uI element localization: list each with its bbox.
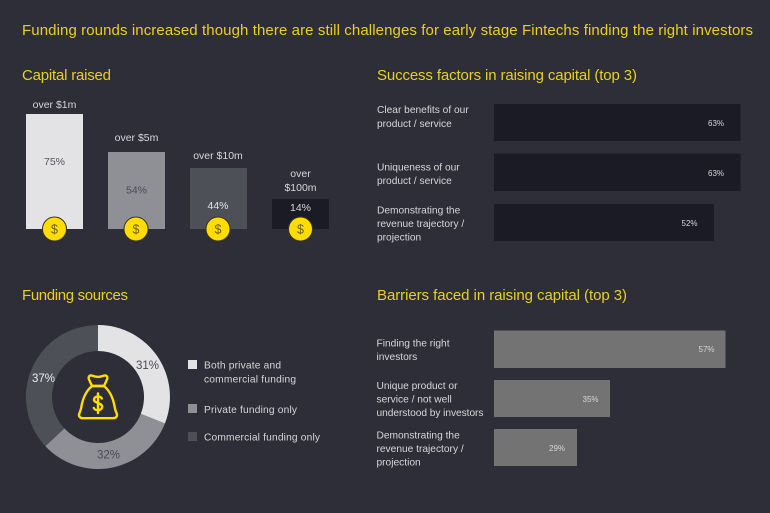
icon: coin 2: $ — [133, 222, 140, 236]
bar: over $100m: $100m — [284, 182, 317, 194]
row: revenue trajectory: Demonstrating the — [377, 206, 461, 216]
row: revenue trajectory: revenue trajectory / — [376, 444, 464, 455]
donut chart: 31% — [136, 360, 159, 372]
donut chart: 32% — [97, 450, 120, 462]
bar: over $5m: over $5m — [115, 132, 159, 144]
heading: funding sources: Funding sources — [22, 287, 128, 304]
row: finding investors: 57% — [698, 345, 715, 354]
icon: coin 1: $ — [51, 222, 58, 236]
row: unique product: 35% — [582, 395, 599, 404]
donut chart: 37% — [32, 373, 55, 385]
row: finding investors: Finding the right — [376, 338, 450, 350]
row: uniqueness: 63% — [708, 169, 724, 178]
panel: barriers — [376, 287, 726, 468]
row: clear benefits — [377, 104, 740, 141]
bar: over $10m: 44% — [207, 200, 229, 212]
icon: coin 3 — [206, 217, 230, 241]
bar: over $1m: 75% — [44, 156, 65, 168]
row: uniqueness: Uniqueness of our — [377, 162, 460, 174]
panel: capital raised — [22, 67, 329, 241]
bar: over $100m: over — [290, 168, 311, 180]
legend: Both private and — [204, 360, 281, 372]
donut chart — [26, 325, 170, 469]
bar: over $100m: 14% — [290, 202, 311, 214]
row: revenue trajectory: projection — [376, 458, 421, 468]
bar: over $1m: over $1m — [33, 99, 77, 111]
icon: coin 2 — [124, 217, 148, 241]
icon: money bag — [79, 375, 117, 418]
icon: coin 4 — [288, 217, 312, 241]
bar: over $10m — [190, 150, 247, 229]
row: revenue trajectory: revenue trajectory / — [377, 219, 464, 230]
row: unique product: understood by investors — [376, 408, 484, 419]
legend — [188, 360, 321, 444]
bar: over $100m — [272, 168, 329, 229]
legend: Commercial funding only — [204, 432, 321, 444]
row: clear benefits: Clear benefits of our — [377, 105, 469, 116]
heading: barriers: Barriers faced in raising capital (top 3) — [377, 287, 627, 304]
icon: coin 3: $ — [215, 222, 222, 236]
bar: over $1m — [26, 99, 83, 229]
title: Funding rounds increased though there are still challenges for early stage Fintechs finding the right investors — [22, 22, 753, 39]
row: uniqueness — [377, 154, 740, 191]
row: unique product — [376, 380, 610, 419]
row: revenue trajectory: 52% — [682, 219, 698, 228]
bar: over $10m: over $10m — [193, 150, 243, 162]
row: clear benefits: product / service — [377, 119, 452, 130]
row: finding investors: investors — [376, 352, 417, 363]
row: revenue trajectory — [377, 204, 714, 244]
legend: Private funding only — [204, 405, 298, 416]
row: revenue trajectory: Demonstrating the — [376, 430, 460, 442]
legend: commercial funding — [204, 374, 296, 386]
panel: success factors — [377, 67, 740, 244]
heading: success factors: Success factors in raising capital (top 3) — [377, 67, 637, 84]
heading: capital raised: Capital raised — [22, 67, 111, 84]
row: revenue trajectory: projection — [377, 232, 421, 244]
row: finding investors — [376, 330, 726, 368]
bar: over $5m: 54% — [126, 184, 147, 196]
row: revenue trajectory — [376, 429, 577, 468]
panel: funding sources — [22, 287, 321, 469]
bar: over $5m — [108, 132, 165, 229]
row: revenue trajectory: 29% — [549, 444, 565, 453]
row: uniqueness: product / service — [377, 176, 452, 187]
row: clear benefits: 63% — [708, 119, 724, 128]
row: unique product: Unique product or — [376, 381, 458, 392]
row: unique product: service / not well — [376, 394, 452, 406]
icon: coin 1 — [42, 217, 66, 241]
icon: coin 4: $ — [297, 222, 304, 236]
